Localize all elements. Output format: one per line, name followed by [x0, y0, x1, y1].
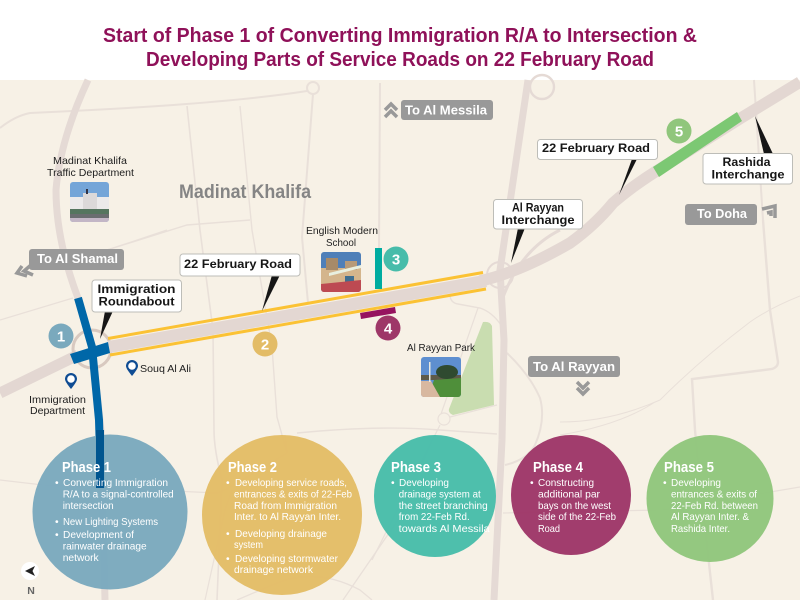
marker 1: 1 [57, 328, 65, 346]
callout: Rashida Interchange: Rashida [722, 155, 771, 169]
panel: phase 2: entrances & exits of 22-Feb [234, 490, 352, 500]
marker 1 [48, 324, 74, 348]
marker 3: 3 [392, 252, 400, 268]
callout: Rashida Interchange: Interchange [712, 168, 785, 182]
panel: phase 2: • [226, 478, 230, 489]
panel: phase 1: • [55, 517, 59, 528]
marker 2: 2 [261, 336, 269, 354]
panel: phase 1 [32, 430, 188, 590]
panel: phase 4: bays on the west [538, 501, 611, 512]
icon: north arrow: N [27, 585, 35, 597]
panel: phase 2: Developing drainage [235, 529, 327, 540]
panel: phase 3: the street branching [399, 501, 488, 512]
panel: phase 4: Road [538, 524, 560, 535]
panel: phase 2: Inter. to Al Rayyan Inter. [234, 512, 341, 523]
title [103, 25, 697, 71]
panel: phase 1: network [63, 553, 100, 564]
panel: phase 5: Al Rayyan Inter. & [671, 512, 749, 523]
title: Developing Parts of Service Roads on 22 February Road [146, 49, 654, 71]
main road: 22 February Road west of roundabout [0, 355, 78, 393]
callout: 22 February Road east [538, 140, 658, 195]
panel: phase 5: entrances & exits of [671, 490, 757, 500]
icon: north arrow [21, 562, 39, 597]
poi: English Modern School: English Modern [306, 225, 378, 237]
major road: west-south arterial [56, 80, 105, 600]
direction label: To Al Messila: To Al Messila [405, 104, 488, 118]
marker 4 [376, 316, 400, 340]
poi: Madinat Khalifa Traffic Department [47, 155, 134, 222]
panel: phase 1: New Lighting Systems [63, 517, 158, 528]
panel: phase 2: Developing service roads, [235, 478, 347, 489]
marker 5: 5 [675, 124, 683, 140]
marker 3 [384, 246, 408, 272]
panel: phase 2: Phase 2 [228, 459, 277, 476]
panel: phase 2: • [226, 554, 230, 565]
callout: Al Rayyan Interchange: Interchange [502, 213, 575, 227]
panel: phase 1: • [55, 530, 59, 541]
panel: phase 2: Developing stormwater [235, 554, 339, 565]
panel: phase 5: Developing [671, 478, 721, 489]
roundabout [73, 330, 111, 368]
panel: phase 3: drainage system at [399, 490, 481, 500]
panel: phase 3: Developing [399, 478, 449, 489]
panel: phase 3: • [391, 478, 395, 489]
panel: phase 4: • [530, 478, 534, 489]
direction label: To Doha [685, 204, 775, 225]
panel: phase 4: Phase 4 [533, 459, 584, 476]
area label: Madinat Khalifa: Madinat Khalifa [179, 182, 311, 203]
panel: phase 3: towards Al Messila [399, 524, 490, 535]
callout: Immigration Roundabout: Immigration [98, 282, 176, 296]
callout: Al Rayyan Interchange [494, 200, 582, 263]
panel: phase 3: Phase 3 [391, 459, 441, 476]
panel: phase 4: side of the 22-Feb [538, 512, 616, 523]
main road: 22 February Road east of Al Rayyan Interchange [480, 82, 800, 281]
phase 3 teal bar [375, 248, 382, 289]
direction label: To Doha: To Doha [697, 207, 748, 221]
panel: phase 5: Rashida Inter. [671, 524, 730, 535]
callout: Al Rayyan Interchange: Al Rayyan [512, 200, 564, 214]
callout: Rashida Interchange [703, 116, 792, 184]
direction label: To Al Shamal [17, 249, 124, 276]
poi: Souq Al Ali [126, 360, 191, 376]
poi: Immigration Department: Immigration [29, 394, 86, 406]
direction label: To Al Rayyan: To Al Rayyan [533, 360, 615, 374]
title: Start of Phase 1 of Converting Immigration R/A to Intersection & [103, 25, 697, 47]
panel: phase 1: • [55, 478, 59, 489]
poi: Al Rayyan Park [407, 342, 476, 397]
poi: Immigration Department [29, 373, 86, 417]
panel: phase 4: additional par [538, 490, 601, 500]
panel: phase 5 [646, 435, 774, 562]
marker 5 [666, 118, 692, 144]
main road widened section with yellow service roads [108, 272, 487, 355]
panel: phase 3 [374, 435, 496, 557]
panel: phase 2: Road from Immigration [234, 501, 337, 512]
poi: Madinat Khalifa Traffic Department: Madinat Khalifa [53, 155, 127, 167]
poi: Souq Al Ali: Souq Al Ali [140, 363, 191, 375]
poi: Al Rayyan Park: Al Rayyan Park [407, 342, 476, 354]
callout: Immigration Roundabout [92, 280, 182, 339]
callout: Immigration Roundabout: Roundabout [98, 294, 174, 308]
direction label: To Al Shamal: To Al Shamal [37, 252, 118, 266]
panel: phase 3: from 22-Feb Rd. [399, 512, 470, 523]
major road: Al Rayyan north-south road [487, 75, 560, 600]
panel: phase 1: Phase 1 [62, 459, 111, 476]
callout: 22 February Road west: 22 February Road [184, 257, 292, 271]
poi: Immigration Department: Department [30, 405, 85, 417]
panel: phase 4: Constructing [538, 478, 594, 489]
callout: 22 February Road west [180, 254, 300, 311]
panel: phase 4 [511, 435, 631, 555]
callout: 22 February Road east: 22 February Road [542, 141, 650, 155]
direction label: To Al Messila [385, 100, 493, 120]
poi: English Modern School [306, 225, 378, 292]
panel: phase 1: rainwater drainage [63, 542, 147, 552]
panel: phase 5: • [663, 478, 667, 489]
panel: phase 1: R/A to a signal-controlled [63, 490, 174, 500]
phase 1 blue road works [70, 298, 110, 488]
marker 4: 4 [384, 320, 393, 338]
panel: phase 5: Phase 5 [664, 459, 714, 476]
panel: phase 2: drainage network [234, 565, 314, 576]
park area [449, 322, 494, 415]
poi: English Modern School: School [326, 237, 356, 249]
phase 4 magenta bar [360, 307, 396, 319]
panel: phase 5: 22-Feb Rd. between [671, 501, 758, 512]
panel: phase 2: system [234, 540, 263, 551]
direction label: To Al Rayyan [528, 356, 620, 394]
marker 2 [252, 332, 278, 356]
phase 5 green bar [653, 112, 742, 177]
panel: phase 2 [202, 435, 362, 595]
poi: Madinat Khalifa Traffic Department: Traffic Department [47, 167, 134, 179]
panel: phase 1: Development of [63, 530, 134, 541]
panel: phase 1: intersection [63, 501, 114, 512]
panel: phase 1: Converting Immigration [63, 478, 168, 489]
panel: phase 2: • [226, 529, 230, 540]
